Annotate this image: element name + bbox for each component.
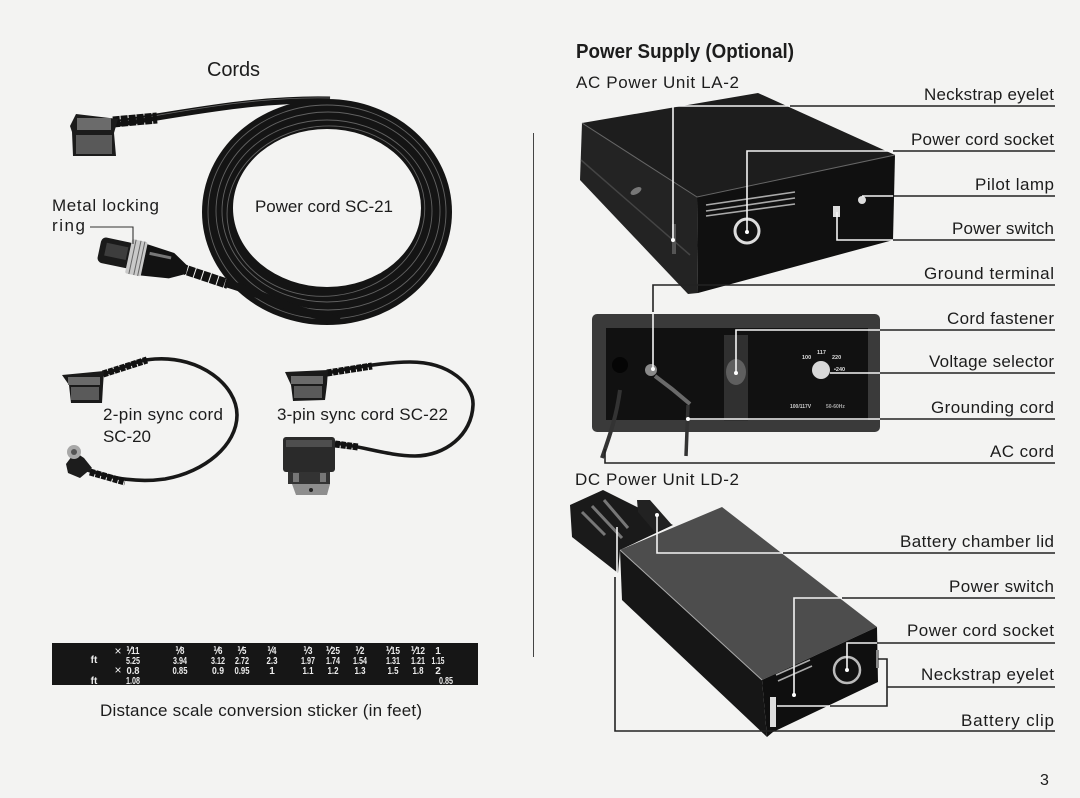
- distance scale sticker: 2: [435, 666, 441, 677]
- distance scale sticker: ⅟4: [268, 646, 277, 657]
- page number: 3: [1040, 772, 1049, 789]
- distance scale sticker: 5.25: [126, 656, 140, 667]
- 3-pin sync cord SC-22: [283, 362, 473, 495]
- distance scale sticker: ⅟25: [326, 646, 340, 657]
- distance scale sticker: 1: [269, 666, 275, 677]
- label: metal locking ring: [52, 196, 159, 244]
- caption: distance scale sticker: Distance scale conversion sticker (in feet): [100, 701, 422, 720]
- subheading: DC Power Unit: DC Power Unit LD-2: [575, 470, 739, 489]
- distance scale sticker: 1.74: [326, 656, 340, 667]
- distance scale sticker: 0.85: [172, 666, 188, 677]
- distance scale sticker: 1.15: [432, 656, 445, 667]
- subheading: AC Power Unit: AC Power Unit LA-2: [576, 73, 739, 92]
- distance scale sticker: 2.72: [235, 656, 249, 667]
- right-hand part labels: Power switch: [949, 577, 1054, 596]
- label: 3-pin sync cord: 3-pin sync cord SC-22: [277, 405, 448, 424]
- right-hand part labels: Voltage selector: [929, 352, 1054, 371]
- AC power unit rear view: [592, 314, 880, 458]
- right-hand part labels: Ground terminal: [924, 264, 1054, 283]
- right-hand part labels: Cord fastener: [947, 309, 1054, 328]
- right-hand part labels: Pilot lamp: [975, 175, 1054, 194]
- label: metal locking ring: ring: [52, 216, 85, 235]
- right-hand part labels: Power cord socket: [911, 130, 1054, 149]
- distance scale sticker: ×: [114, 663, 122, 677]
- distance scale sticker: 1.97: [301, 656, 315, 667]
- distance scale sticker: 1: [435, 646, 441, 657]
- distance scale sticker: 0.8: [126, 666, 140, 677]
- right-hand part labels: Power cord socket: [907, 621, 1054, 640]
- distance scale sticker: 1.31: [386, 656, 400, 667]
- distance scale sticker: ft: [91, 655, 98, 666]
- label: 2-pin sync cord: [103, 405, 223, 446]
- AC power unit rear view: 117: [817, 350, 826, 356]
- power cord SC-21 illustration: [70, 98, 452, 325]
- distance scale sticker: 1.21: [411, 656, 425, 667]
- distance scale sticker: 3.12: [211, 656, 225, 667]
- distance scale sticker: ⅟6: [214, 646, 223, 657]
- panel: cords: [52, 59, 478, 720]
- distance scale sticker: ⅟5: [238, 646, 247, 657]
- distance scale sticker: 1.8: [412, 666, 424, 677]
- AC power unit rear view: 100: [802, 355, 811, 361]
- AC power unit rear view: •240: [834, 367, 845, 373]
- distance scale sticker: ×: [114, 644, 122, 658]
- distance scale sticker: 2.3: [266, 656, 278, 667]
- label: metal locking ring: Metal locking: [52, 196, 159, 215]
- distance scale sticker: 0.95: [234, 666, 250, 677]
- distance scale sticker: ⅟15: [386, 646, 400, 657]
- callout lines: white over photos, black on page: [605, 106, 1055, 731]
- AC power unit rear view: 100/117V: [790, 404, 812, 410]
- distance scale sticker: ⅟11: [126, 646, 140, 657]
- distance scale sticker: 1.5: [388, 666, 399, 677]
- right-hand part labels: Battery chamber lid: [900, 532, 1054, 551]
- distance scale sticker: 1.54: [353, 656, 367, 667]
- distance scale sticker: [52, 643, 478, 687]
- right-hand part labels: Battery clip: [961, 711, 1054, 730]
- AC power unit rear view: 220: [832, 355, 841, 361]
- heading: Cords: Cords: [207, 59, 260, 81]
- distance scale sticker: ft: [91, 676, 98, 687]
- panel: power supply: [570, 41, 1055, 737]
- distance scale sticker: 1.1: [302, 666, 314, 677]
- AC power unit front view: [580, 93, 895, 294]
- distance scale sticker: 1.2: [328, 666, 339, 677]
- right-hand part labels: [900, 85, 1054, 730]
- right-hand part labels: Grounding cord: [931, 398, 1054, 417]
- distance scale sticker: ⅟3: [304, 646, 313, 657]
- column divider: [533, 133, 534, 657]
- DC power unit: [570, 490, 879, 737]
- right-hand part labels: Neckstrap eyelet: [924, 85, 1054, 104]
- heading: Power Supply: Power Supply (Optional): [576, 41, 794, 63]
- label: power cord SC-21: Power cord SC-21: [255, 197, 393, 216]
- distance scale sticker: 1.3: [354, 666, 366, 677]
- distance scale sticker: ⅟8: [176, 646, 185, 657]
- AC power unit rear view: 50-60Hz: [826, 404, 845, 410]
- right-hand part labels: AC cord: [990, 442, 1054, 461]
- distance scale sticker: ⅟2: [356, 646, 365, 657]
- distance scale sticker: ⅟12: [411, 646, 425, 657]
- distance scale sticker: 0.9: [212, 666, 224, 677]
- distance scale sticker: 3.94: [173, 656, 187, 667]
- distance scale sticker: 1.08: [126, 676, 140, 687]
- 2-pin sync cord SC-20: [62, 359, 237, 482]
- right-hand part labels: Power switch: [952, 219, 1054, 238]
- metal locking ring connector: [96, 233, 191, 286]
- right-hand part labels: Neckstrap eyelet: [921, 665, 1054, 684]
- label: 2-pin sync cord: SC-20: [103, 427, 151, 446]
- label: 2-pin sync cord: 2-pin sync cord: [103, 405, 223, 424]
- distance scale sticker: 0.85: [439, 676, 453, 687]
